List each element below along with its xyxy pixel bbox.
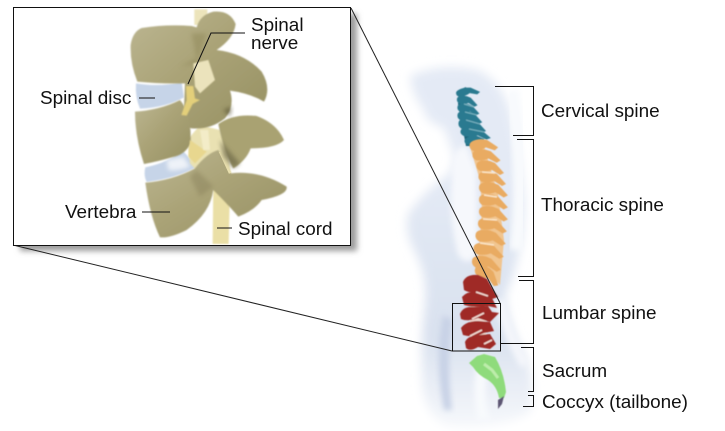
lumbar spine vertebrae xyxy=(460,275,499,350)
body silhouette xyxy=(407,67,533,427)
bracket: cervical spine xyxy=(495,86,534,136)
label: thoracic spine: Thoracic spine xyxy=(541,195,664,216)
label: vertebra xyxy=(65,202,170,223)
label: coccyx: Coccyx (tailbone) xyxy=(542,392,688,413)
thoracic spine vertebrae xyxy=(468,135,508,287)
label: spinal nerve xyxy=(188,15,304,84)
sacrum and coccyx xyxy=(469,354,506,409)
zoom selection box xyxy=(452,304,500,351)
bracket: sacrum xyxy=(521,348,534,392)
panel: spinal closeup xyxy=(14,8,350,246)
zoom connector line: bottom xyxy=(13,245,452,351)
cervical spine vertebrae xyxy=(455,83,491,149)
label: vertebra: Vertebra xyxy=(65,202,137,223)
label: spinal cord: Spinal cord xyxy=(238,219,333,240)
zoom connector line: top xyxy=(351,8,500,303)
bracket: lumbar spine xyxy=(500,280,534,344)
label: spinal nerve: Spinal xyxy=(251,15,304,36)
bracket: coccyx xyxy=(523,396,534,406)
label: sacrum: Sacrum xyxy=(542,361,607,382)
label: spinal nerve: nerve xyxy=(251,33,298,54)
panel shadow xyxy=(20,14,357,251)
bracket: thoracic spine xyxy=(517,140,534,276)
label: spinal disc: Spinal disc xyxy=(40,88,131,109)
vertebra illustration xyxy=(131,9,287,244)
label: lumbar spine: Lumbar spine xyxy=(542,303,656,324)
label: cervical spine: Cervical spine xyxy=(541,101,660,122)
